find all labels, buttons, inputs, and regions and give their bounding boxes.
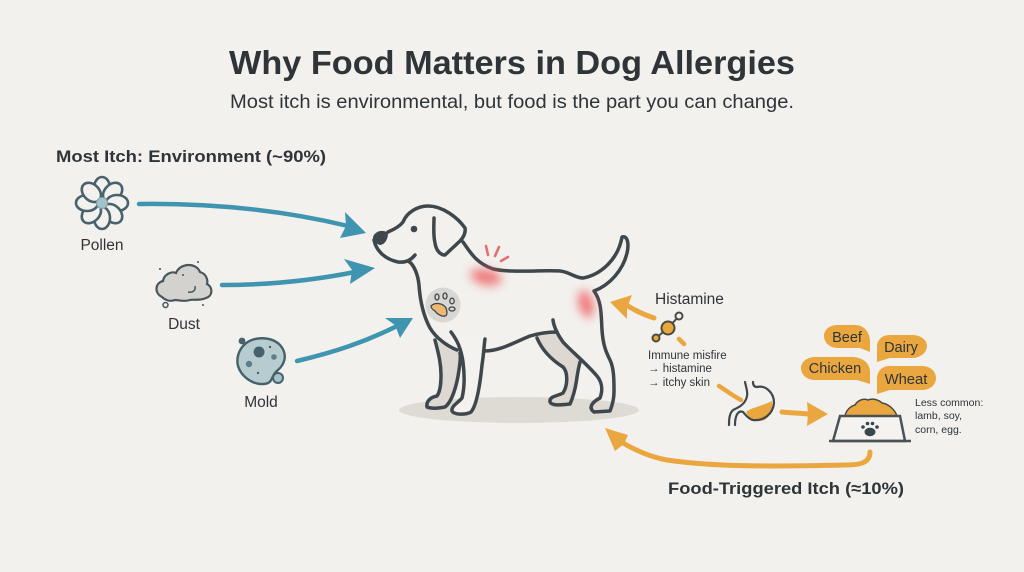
- head and ear: [388, 206, 465, 255]
- food bubble: beef: [824, 325, 870, 352]
- back, tail and near rear leg: [463, 237, 628, 412]
- food bubble: beef: Beef: [832, 330, 863, 346]
- connector: skin to stomach: [719, 386, 741, 400]
- arrow: food back to dog: [605, 428, 870, 466]
- text: less common foods: corn, egg.: [915, 424, 962, 436]
- ground shadow: [399, 397, 639, 423]
- irritated skin: hip: [576, 289, 596, 319]
- irritated skin: shoulder: [469, 266, 503, 288]
- food bubble: wheat: [877, 366, 936, 394]
- arrow: stomach to bowl: [782, 402, 828, 426]
- icon: dog food bowl: [829, 399, 911, 441]
- text: immune misfire: → histamine: [648, 363, 712, 375]
- illustration: dog: [373, 206, 628, 414]
- icon: histamine molecule: [652, 312, 682, 342]
- food bubble: dairy: [877, 335, 927, 362]
- near front leg: [451, 332, 485, 414]
- icon: mold spore: [237, 338, 285, 384]
- text: less common foods: Less common:: [915, 397, 983, 409]
- label: pollen: Pollen: [80, 237, 124, 254]
- label: mold: Mold: [244, 394, 278, 411]
- icon: paw badge: [426, 288, 460, 322]
- belly: [485, 332, 557, 351]
- nose: [373, 231, 388, 245]
- subtitle: Most itch is environmental, but food is the part you can change.: [230, 91, 794, 113]
- arrow: mold to dog: [297, 318, 413, 361]
- environment heading: Most Itch: Environment (~90%): [56, 147, 326, 166]
- text: immune misfire: Immune misfire: [648, 350, 727, 362]
- food bubble: wheat: Wheat: [885, 372, 927, 388]
- food bubble: dairy: Dairy: [884, 340, 919, 356]
- arrow: histamine to dog: [610, 295, 654, 319]
- food bubble: chicken: [801, 357, 870, 384]
- label: dust: Dust: [168, 316, 201, 333]
- far rear leg: [537, 332, 580, 405]
- text: immune misfire: [648, 350, 727, 389]
- eye: [411, 226, 417, 232]
- muzzle and chin: [374, 240, 415, 262]
- text: immune misfire: → itchy skin: [648, 377, 710, 389]
- itch marks: [486, 246, 508, 261]
- food-triggered heading: Food-Triggered Itch (≈10%): [668, 479, 904, 498]
- label: histamine: Histamine: [655, 291, 724, 308]
- text: less common foods: [915, 397, 983, 436]
- icon: pollen flower: [76, 177, 128, 229]
- title: Why Food Matters in Dog Allergies: [229, 44, 795, 81]
- short connector dash: [679, 339, 684, 344]
- icon: dust cloud: [156, 261, 211, 308]
- text: less common foods: lamb, soy,: [915, 410, 962, 422]
- food bubble: chicken: Chicken: [809, 361, 861, 377]
- icon: stomach: [729, 382, 774, 425]
- chest: [408, 261, 457, 350]
- far front leg: [427, 340, 460, 408]
- arrow: dust to dog: [222, 259, 375, 285]
- arrow: pollen to dog: [139, 204, 366, 238]
